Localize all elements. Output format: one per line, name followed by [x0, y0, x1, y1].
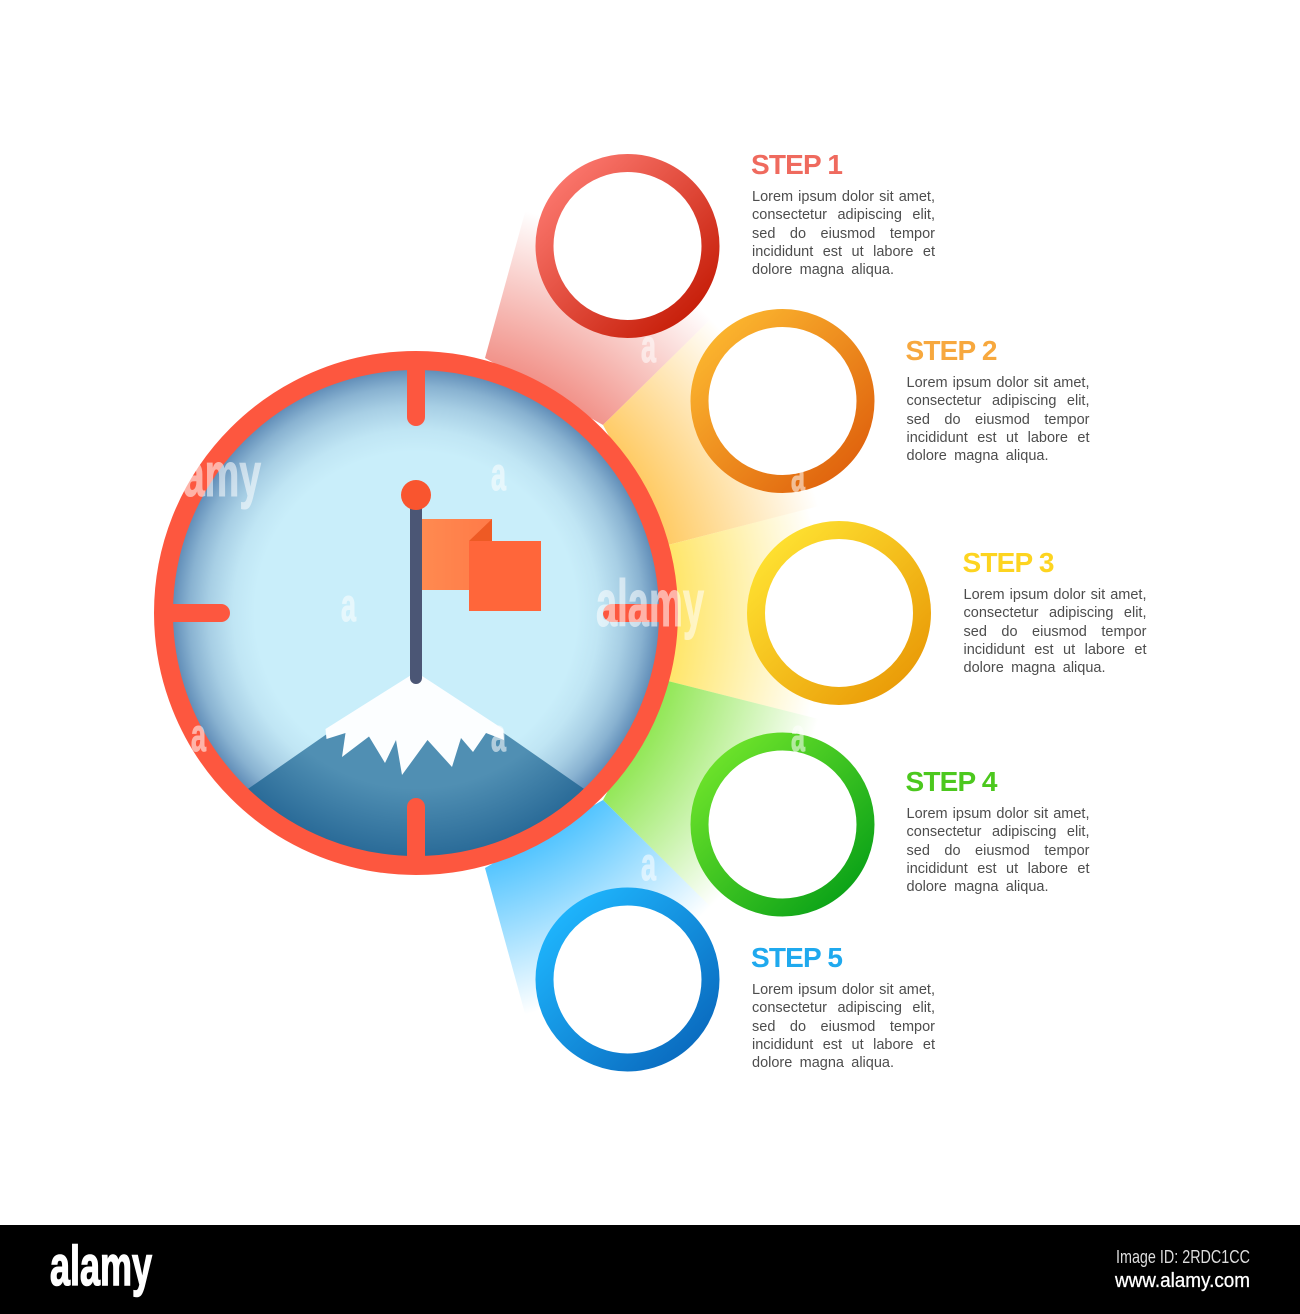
watermark: a: [341, 579, 356, 631]
ring: step 3: [756, 530, 922, 696]
beam: step 2: [603, 300, 850, 545]
ring: step 2: [700, 318, 866, 484]
step 2 body: Lorem ipsum dolor sit amet,: [906, 375, 1090, 391]
snow cap: [326, 672, 504, 775]
step 5 body: dolore magna aliqua.: [752, 1055, 894, 1071]
website: www.alamy.com: [1114, 1270, 1250, 1292]
step 5 body: consectetur adipiscing elit,: [752, 1000, 935, 1016]
dial face: [172, 369, 660, 857]
step 3 heading: STEP 3: [962, 547, 1054, 578]
beam: step 4: [603, 681, 850, 926]
step 3 body: [964, 587, 1146, 676]
beam: step 5: [485, 800, 730, 1021]
watermark: alamy: [596, 566, 704, 640]
watermark: [183, 320, 805, 890]
watermark: a: [791, 709, 805, 761]
step 3 body: Lorem ipsum dolor sit amet,: [964, 587, 1146, 603]
watermark: a: [491, 448, 506, 500]
step 2 body: dolore magna aliqua.: [906, 448, 1048, 464]
watermark: a: [191, 709, 206, 761]
watermark: a: [641, 838, 656, 890]
step 5 heading: STEP 5: [751, 942, 842, 973]
step 1 body: Lorem ipsum dolor sit amet,: [752, 189, 935, 205]
step 4 body: Lorem ipsum dolor sit amet,: [906, 806, 1090, 822]
step 4 body: sed do eiusmod tempor: [906, 843, 1090, 859]
watermark: a: [641, 320, 656, 372]
step 2 text: [906, 335, 1090, 464]
beam: step 3: [668, 498, 850, 727]
watermark: a: [491, 709, 506, 761]
step 5 text: [751, 942, 935, 1071]
image id: Image ID: 2RDC1CC: [1116, 1247, 1250, 1267]
step 1 body: incididunt est ut labore et: [752, 244, 935, 260]
step 3 body: incididunt est ut labore et: [964, 642, 1146, 658]
flag: [422, 519, 541, 611]
step 1 body: sed do eiusmod tempor: [752, 226, 935, 242]
step 1 heading: STEP 1: [751, 149, 842, 180]
step 3 body: dolore magna aliqua.: [964, 660, 1106, 676]
step 5 body: [752, 982, 935, 1071]
step 4 body: incididunt est ut labore et: [906, 861, 1090, 877]
step 3 body: sed do eiusmod tempor: [964, 624, 1146, 640]
dial edge shading: [172, 369, 660, 857]
step 3 text: [962, 547, 1146, 676]
step 2 body: sed do eiusmod tempor: [906, 412, 1090, 428]
step 2 heading: STEP 2: [906, 335, 997, 366]
crosshair ticks: [168, 365, 664, 861]
step 2 body: consectetur adipiscing elit,: [906, 393, 1090, 409]
step 1 body: [752, 189, 935, 278]
ring: step 5: [544, 896, 710, 1062]
watermark: a: [791, 449, 805, 501]
step 1 body: consectetur adipiscing elit,: [752, 207, 935, 223]
step 4 body: consectetur adipiscing elit,: [906, 824, 1090, 840]
flag pole: [410, 495, 422, 684]
dial ring: [164, 360, 668, 866]
step 4 text: [906, 766, 1090, 895]
ring: step 4: [700, 742, 866, 908]
step 4 body: dolore magna aliqua.: [906, 879, 1048, 895]
beam: step 1: [485, 205, 730, 425]
step 2 body: [906, 375, 1090, 464]
step 1 text: [751, 149, 935, 278]
step 5 body: Lorem ipsum dolor sit amet,: [752, 982, 935, 998]
step 3 body: consectetur adipiscing elit,: [964, 605, 1146, 621]
pole knob: [401, 480, 431, 510]
step 1 body: dolore magna aliqua.: [752, 262, 894, 278]
alamy logo: alamy: [50, 1234, 152, 1297]
step 2 body: incididunt est ut labore et: [906, 430, 1090, 446]
step 5 body: incididunt est ut labore et: [752, 1037, 935, 1053]
step 5 body: sed do eiusmod tempor: [752, 1019, 935, 1035]
footer bar: [0, 1225, 1300, 1314]
step 4 body: [906, 806, 1090, 895]
step 4 heading: STEP 4: [906, 766, 997, 797]
ring: step 1: [544, 163, 710, 329]
mountain: [248, 676, 584, 856]
main graphic: [154, 154, 931, 1072]
watermark: amy: [183, 441, 261, 510]
target dial: [164, 360, 668, 880]
